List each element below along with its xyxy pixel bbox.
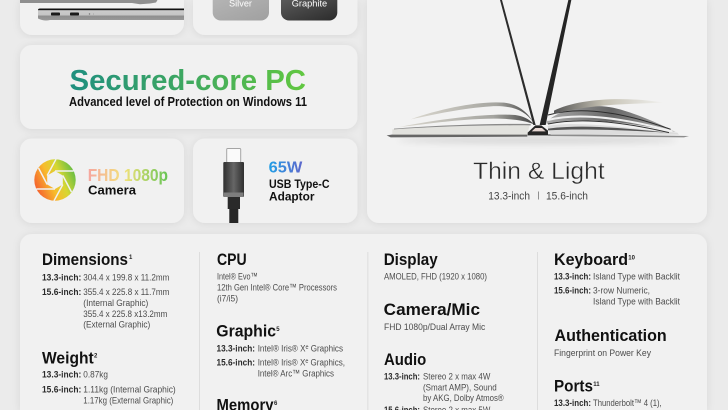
spec: dimensions: (External Graphic)	[83, 320, 150, 331]
panel: secured-core PC	[20, 45, 358, 129]
text: camera: Camera	[88, 184, 137, 198]
spec: CPU: Intel® Evo™	[217, 271, 258, 282]
spec: weight: 13.3-inch:	[42, 370, 81, 381]
spec: authentication	[554, 329, 666, 358]
spec: graphic: Intel® Iris® Xᵉ Graphics	[258, 343, 343, 354]
spec: authentication: Fingerprint on Power Key	[554, 348, 651, 359]
spec: keyboard: Keyboard	[554, 250, 628, 269]
spec: keyboard: 3-row Numeric,	[593, 285, 650, 296]
spec: graphic: Intel® Iris® Xᵉ Graphics,	[258, 358, 345, 369]
spec: keyboard: 13.3-inch:	[554, 271, 591, 282]
spec: memory	[218, 399, 278, 410]
spec: ports	[554, 380, 661, 408]
icon: camera aperture	[34, 159, 76, 201]
spec: CPU: (i7/i5)	[217, 293, 238, 304]
panel: thin and light	[367, 0, 707, 223]
text: FHD 1080p: FHD 1080p	[88, 165, 168, 185]
spec: keyboard: Island Type with Backlit	[593, 297, 680, 308]
spec: dimensions: 1	[129, 255, 133, 261]
text: sizes	[488, 190, 588, 202]
spec: graphic: Graphic	[216, 322, 276, 341]
spec: display	[384, 253, 486, 282]
spec: keyboard: Island Type with Backlit	[593, 271, 680, 282]
spec: dimensions: 355.4 x 225.8 x 11.7mm	[83, 287, 169, 298]
spec: keyboard: 10	[628, 256, 636, 262]
spec: dimensions: 304.4 x 199.8 x 11.2mm	[83, 273, 169, 284]
subheading: Advanced level of Protection on Windows 11	[69, 95, 307, 109]
spec: graphic: Intel® Arc™ Graphics	[258, 369, 334, 380]
spec: CPU	[217, 250, 337, 304]
spec: dimensions	[42, 250, 169, 331]
laptop side with ports	[38, 8, 184, 20]
spec: weight: 2	[94, 354, 98, 360]
spec: dimensions: Dimensions	[42, 250, 128, 269]
spec: graphic: 5	[276, 327, 280, 333]
spec: dimensions: 15.6-inch:	[42, 287, 81, 298]
spec: display: AMOLED, FHD (1920 x 1080)	[384, 271, 487, 282]
illustration: laptop standing in open book	[387, 0, 689, 143]
spec: weight: 0.87kg	[83, 370, 108, 381]
spec: audio: by AKG, Dolby Atmos®	[423, 393, 504, 404]
panel: camera	[20, 138, 184, 223]
text: sizes: 15.6-inch	[546, 190, 588, 202]
spec: graphic: 13.3-inch:	[216, 343, 255, 354]
spec: camera and mic	[384, 303, 485, 332]
spec: CPU: CPU	[217, 250, 247, 269]
spec: dimensions: 13.3-inch:	[42, 273, 81, 284]
spec: CPU: 12th Gen Intel® Core™ Processors	[217, 282, 337, 293]
spec: graphic	[216, 322, 345, 380]
text: USB Type-C Adaptor: USB Type-C	[269, 177, 330, 191]
heading: thin and light: Thin & Light	[473, 158, 605, 185]
spec: ports: Ports	[554, 377, 593, 396]
panel: USB-C adaptor	[193, 138, 358, 223]
spec: audio: (Smart AMP), Sound	[423, 382, 497, 393]
panel: colour options	[193, 0, 358, 35]
spec: authentication: Authentication	[554, 326, 667, 345]
text: USB Type-C Adaptor: Adaptor	[269, 190, 315, 204]
spec: camera and mic: Camera/Mic	[384, 300, 480, 319]
spec: keyboard: 15.6-inch:	[554, 285, 591, 296]
spec: ports: Thunderbolt™ 4 (1),	[593, 398, 662, 409]
spec: audio	[384, 350, 504, 410]
heading: secured-core PC: Secured-core PC	[70, 65, 306, 97]
spec: ports: 11	[593, 382, 600, 388]
spec: dimensions: (Internal Graphic)	[83, 298, 148, 309]
spec: audio: Stereo 2 x max 4W	[423, 371, 491, 382]
spec: ports: 13.3-inch:	[554, 398, 591, 409]
spec: camera and mic: FHD 1080p/Dual Array Mic	[384, 322, 485, 333]
spec: dimensions: 355.4 x 225.8 x13.2mm	[83, 309, 167, 320]
spec: weight: 15.6-inch:	[42, 384, 81, 395]
spec: display: Display	[384, 250, 438, 269]
spec: weight: 1.17kg (External Graphic)	[83, 395, 173, 406]
panel: laptop side views	[20, 0, 184, 35]
swatch: silver	[213, 0, 269, 20]
spec: weight: Weight	[42, 348, 94, 367]
text: 65W: 65W	[269, 160, 303, 176]
spec: keyboard	[554, 250, 680, 308]
swatch: graphite	[281, 0, 337, 20]
laptop lid edge	[20, 0, 158, 4]
icon: USB-C plug	[223, 148, 244, 223]
text: sizes: 13.3-inch	[488, 190, 530, 202]
spec: audio: 13.3-inch:	[384, 371, 420, 382]
spec: weight	[42, 348, 176, 406]
panel: specifications	[20, 234, 707, 410]
spec: audio: Audio	[384, 350, 426, 369]
spec: weight: 1.11kg (Internal Graphic)	[83, 384, 176, 395]
spec: graphic: 15.6-inch:	[216, 358, 255, 369]
text: USB Type-C Adaptor	[269, 177, 330, 204]
spec: memory: 6	[274, 401, 278, 407]
